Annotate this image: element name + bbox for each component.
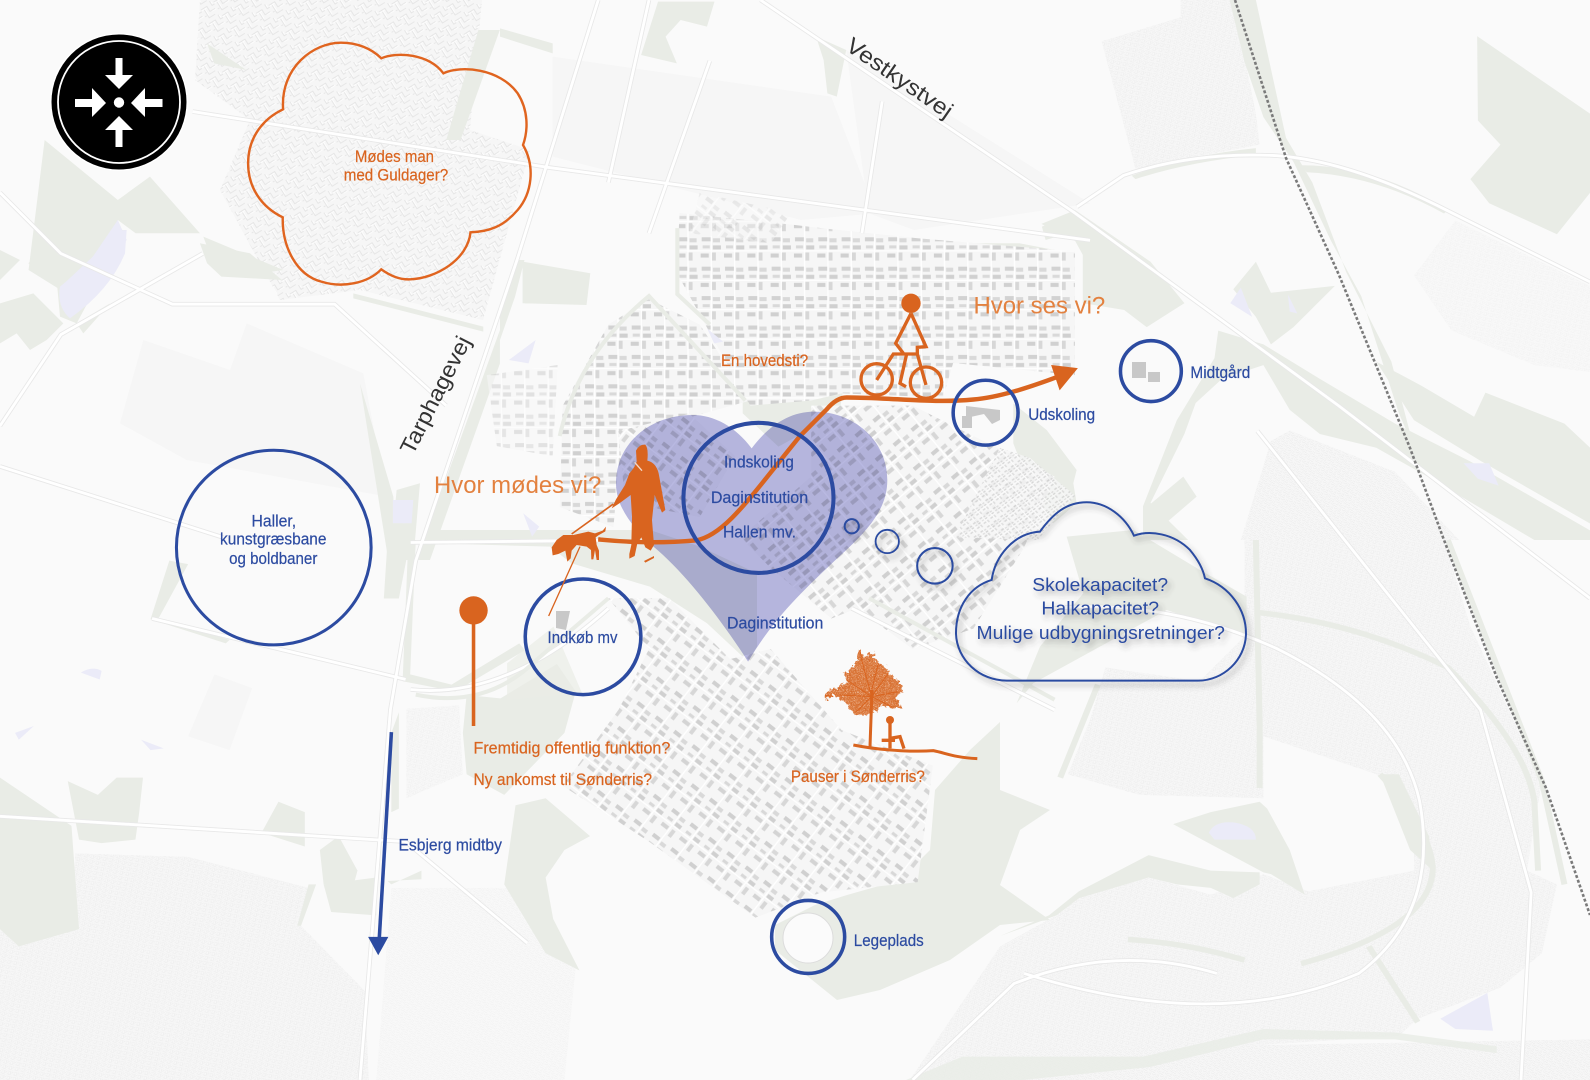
label: Daginstitution: Daginstitution <box>727 615 823 633</box>
railway <box>1235 0 1590 915</box>
circle: Haller: kunstgræsbane <box>220 531 327 549</box>
blue thought cloud <box>956 502 1246 681</box>
icon: tree with seated person <box>825 649 977 759</box>
overlay annotations <box>176 33 1250 973</box>
arrow: to Esbjerg <box>368 732 391 955</box>
circle: skole: Indskoling <box>724 453 794 471</box>
playground ring <box>783 913 833 963</box>
label: Mødes man med Guldager: med Guldager? <box>344 166 448 184</box>
circle: skole: Hallen mv. <box>723 523 796 541</box>
fields <box>120 50 1090 750</box>
label: Mødes man med Guldager <box>344 148 448 184</box>
circle: Udskoling <box>953 380 1095 445</box>
blue thought cloud: Mulige udbygningsretninger? <box>976 622 1225 643</box>
label: Fremtidig offentlig funktion: Fremtidig offentlig funktion? <box>474 739 670 757</box>
circle: Midtgård <box>1120 341 1250 402</box>
circle: Haller <box>176 450 371 645</box>
label: Pauser: Pauser i Sønderris? <box>791 768 925 786</box>
icon: logo converging arrows <box>50 33 188 171</box>
icon: cyclist <box>861 294 942 398</box>
circle: Legeplads: Legeplads <box>854 932 924 950</box>
circle: Legeplads <box>772 900 924 973</box>
heart <box>616 412 887 662</box>
circle: Midtgård: Midtgård <box>1190 364 1250 382</box>
road name: Vestkystvej: Vestkystvej <box>842 33 958 123</box>
blue thought cloud: Skolekapacitet? <box>1032 574 1168 595</box>
heading: Hvor mødes vi: Hvor mødes vi? <box>434 472 601 499</box>
icon: woman walking dog <box>549 445 665 616</box>
circle: Haller: og boldbaner <box>229 550 318 568</box>
heading: Hvor ses vi: Hvor ses vi? <box>973 292 1105 319</box>
pin: future public function <box>459 596 488 726</box>
thought bubbles <box>845 519 953 584</box>
label: En hovedsti: En hovedsti? <box>721 352 808 370</box>
forest south-east <box>775 722 1050 1000</box>
circle: Haller: Haller, <box>251 512 296 530</box>
circle: skole: Daginstitution <box>711 489 808 507</box>
buildings in circles <box>556 362 1160 630</box>
circle: Indkøb: Indkøb mv <box>548 629 618 647</box>
blue thought cloud: Halkapacitet? <box>1041 597 1159 618</box>
main path and arrow <box>598 365 1078 542</box>
orange cloud <box>248 43 531 285</box>
label: Ny ankomst: Ny ankomst til Sønderris? <box>474 771 652 789</box>
circle: Udskoling: Udskoling <box>1028 406 1095 424</box>
road name: Tarphagevej: Tarphagevej <box>395 332 476 458</box>
label: Mødes man med Guldager: Mødes man <box>355 148 434 166</box>
circle: Indkøb <box>525 579 641 695</box>
houses <box>487 193 1160 963</box>
water <box>15 220 1499 1031</box>
label: Esbjerg midtby: Esbjerg midtby <box>399 837 503 855</box>
circle: skole <box>683 423 834 573</box>
